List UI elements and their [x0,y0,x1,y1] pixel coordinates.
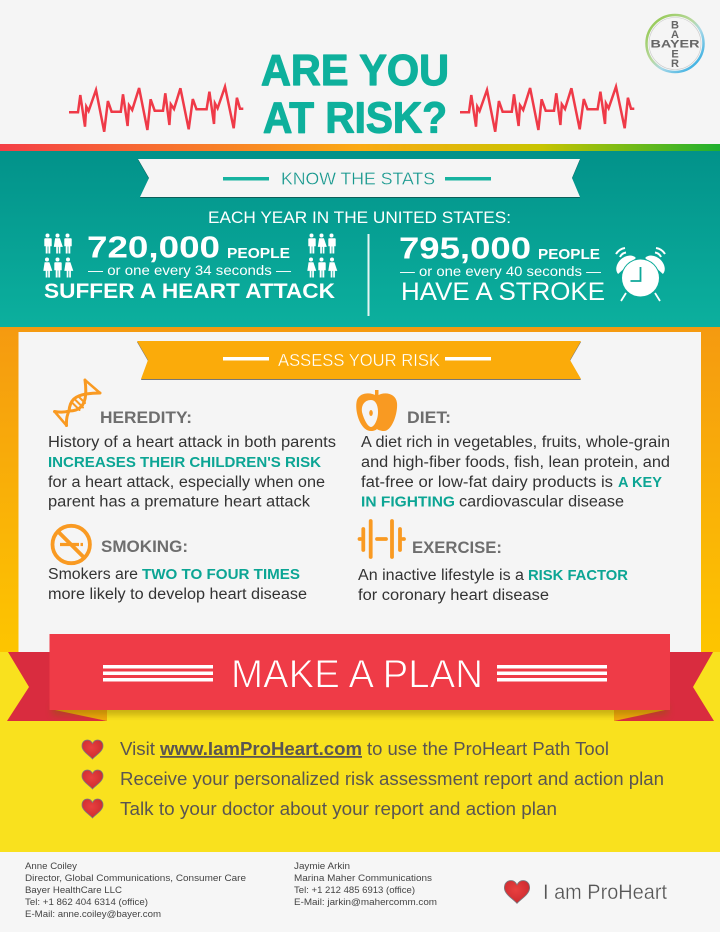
subheading: EACH YEAR IN THE UNITED STATES: [208,208,511,227]
text: diet: cardiovascular disease [459,494,624,510]
footer background [0,852,720,932]
logo: Bayer cross: R [671,58,679,70]
text: heredity: for a heart attack, especially when one [48,474,325,491]
icon: apple [356,390,397,431]
text: diet: and high-fiber foods, fish, lean protein, and [361,454,670,471]
text: heredity [48,434,336,510]
rainbow divider [0,144,720,151]
icon: dna [54,380,100,426]
ribbon tail: left [7,652,107,721]
contact: Anne Coiley [25,861,246,920]
stat: stroke: PEOPLE [538,246,600,263]
logo: Bayer cross: B [671,20,679,32]
heading: smoking: SMOKING: [101,537,188,556]
text: diet [361,434,670,510]
ribbon tail: right [614,652,714,721]
text: smoking: Smokers are [48,566,138,583]
logo: Bayer cross [646,15,704,72]
text: diet: A diet rich in vegetables, fruits, whole-grain [361,434,670,451]
action item 1: www.IamProHeart.com [159,739,362,759]
text: smoking: more likely to develop heart disease [48,586,307,603]
action item 1 [82,739,609,759]
contact: Jaymie Arkin [294,861,437,908]
action item 1: Visit [120,739,155,759]
contact: Jaymie Arkin: Jaymie Arkin [294,861,350,872]
heading: exercise: EXERCISE: [412,538,502,557]
action item 1: to use the ProHeart Path Tool [367,739,609,759]
stat: stroke: 795,000 [399,232,531,266]
text: diet: A KEY [618,474,662,491]
banner: make a plan [50,634,670,710]
stat: heart attack: SUFFER A HEART ATTACK [44,279,335,303]
contact: Anne Coiley: Tel: +1 862 404 6314 (office) [25,897,148,908]
text: heredity: parent has a premature heart attack [48,494,310,510]
icon: right heartbeat line [460,87,634,132]
icon: people right [307,234,337,278]
icon: barbell [360,521,404,557]
stat: heart attack: 720,000 [87,230,220,264]
stat: heart attack: PEOPLE [227,245,290,262]
panel: make a plan [0,634,720,852]
text: exercise: for coronary heart disease [358,587,549,604]
contact: Jaymie Arkin: Marina Maher Communications [294,873,432,884]
banner: make a plan: MAKE A PLAN [231,652,483,696]
panel: know the stats [0,151,720,328]
text: heredity: INCREASES THEIR CHILDREN'S RISK [48,454,321,471]
heading: heredity: HEREDITY: [100,408,192,427]
contact: Jaymie Arkin: E-Mail: jarkin@mahercomm.com [294,897,437,908]
logo: Bayer cross: BAYER [650,38,700,50]
logo: Bayer cross: A [671,29,679,41]
stat: heart attack [44,230,335,303]
banner: know the stats: KNOW THE STATS [281,168,435,188]
contact: Anne Coiley: E-Mail: anne.coiley@bayer.com [25,909,161,920]
text: exercise [358,567,628,604]
text: heredity: History of a heart attack in both parents [48,434,336,451]
stat: stroke: — or one every 40 seconds — [400,263,601,279]
title: AT RISK? [263,94,447,142]
text: smoking [48,566,307,603]
panel: assess your risk [0,327,720,652]
title [261,46,449,142]
action item 3: Talk to your doctor about your report and action plan [120,799,557,819]
text: smoking: TWO TO FOUR TIMES [142,566,300,583]
icon: alarm clock [612,248,669,301]
text: diet: fat-free or low-fat dairy products is [361,474,613,491]
banner: assess your risk [137,341,581,380]
text: exercise: An inactive lifestyle is a [358,567,524,584]
contact: Jaymie Arkin: Tel: +1 212 485 6913 (office) [294,885,415,896]
contact: Anne Coiley: Bayer HealthCare LLC [25,885,122,896]
title: ARE YOU [261,46,449,95]
contact: Anne Coiley: Director, Global Communications, Consumer Care [25,873,246,884]
icon: people left [43,234,73,278]
banner: know the stats [138,159,580,198]
text: exercise: RISK FACTOR [528,567,628,584]
banner: assess your risk: ASSESS YOUR RISK [278,350,440,370]
heading: diet: DIET: [407,408,451,427]
contact: Anne Coiley: Anne Coiley [25,861,77,872]
stat: stroke: HAVE A STROKE [401,278,605,306]
banner shadow [52,704,668,715]
logo: Bayer cross: E [671,48,679,60]
stat: heart attack: — or one every 34 seconds — [88,262,291,278]
text: diet: IN FIGHTING [361,494,455,510]
stat: stroke [399,232,605,306]
icon: no smoking [52,526,90,563]
icon: left heartbeat line [69,87,243,132]
action item 2: Receive your personalized risk assessment report and action plan [120,769,664,789]
logo: I am ProHeart: I am ProHeart [543,881,667,904]
